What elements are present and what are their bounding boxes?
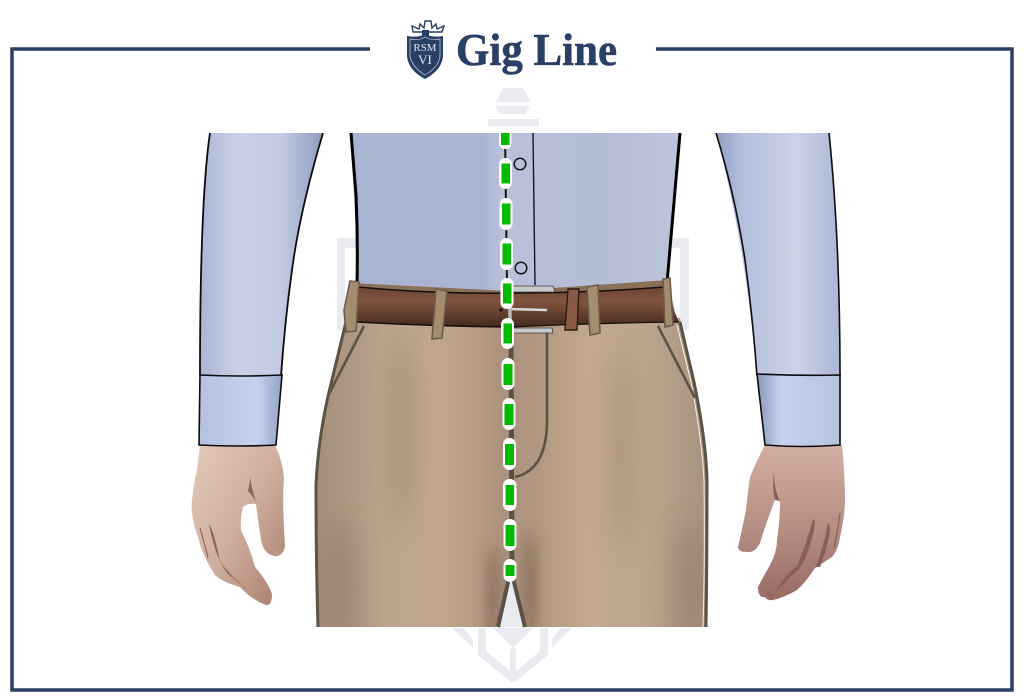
icon: crest shield bbox=[407, 21, 444, 79]
belt keeper bbox=[565, 289, 579, 330]
belt loop bbox=[663, 278, 673, 327]
right pocket bbox=[658, 326, 695, 398]
left pocket bbox=[329, 326, 364, 394]
button bbox=[515, 262, 527, 274]
belt buckle bbox=[499, 286, 555, 333]
shirt torso bbox=[350, 133, 681, 296]
watermark crest bbox=[337, 88, 689, 682]
title bbox=[407, 21, 617, 79]
belt loop bbox=[587, 285, 600, 335]
crotch gap bbox=[497, 578, 525, 627]
cuff bbox=[757, 374, 840, 446]
belt bbox=[344, 278, 679, 339]
icon: crest shield: VI bbox=[418, 52, 432, 67]
center seam bbox=[511, 330, 512, 582]
trousers bbox=[316, 318, 708, 660]
right hand bbox=[738, 445, 845, 600]
gig line: dashed green alignment line bbox=[499, 128, 516, 582]
left hand bbox=[192, 445, 285, 605]
left sleeve bbox=[199, 133, 323, 446]
cuff bbox=[199, 375, 282, 446]
icon: crest shield: RSM bbox=[414, 42, 437, 54]
belt loop bbox=[344, 281, 359, 332]
right sleeve bbox=[716, 133, 840, 446]
placket line bbox=[533, 133, 535, 285]
belt loop bbox=[432, 289, 447, 339]
button bbox=[514, 158, 526, 170]
fly stitching bbox=[515, 332, 547, 477]
heading text: Gig Line bbox=[456, 24, 617, 75]
